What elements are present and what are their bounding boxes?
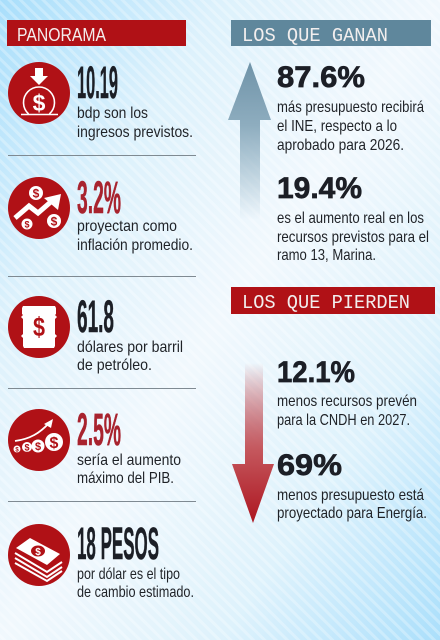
description: proyectan como [77,218,177,235]
item: pib: 2.5% [77,404,121,455]
figure: 69%: 69% [277,449,342,482]
panel: los que ganan [228,20,431,264]
item: pib [8,404,181,487]
description: ramo 13, Marina. [277,247,376,264]
arrow: down [232,363,274,523]
icon: oil barrel: $ [33,312,45,342]
description [77,452,181,487]
icon: coins with rising curve: $ [15,448,19,454]
item: tipo de cambio: 18 PESOS [77,518,159,569]
description: por dólar es el tipo [77,566,180,583]
item: inflacion: 3.2% [77,172,121,223]
heading: los que pierden [231,287,435,314]
icon: coins with rising curve: $ [24,442,30,452]
description: menos recursos prevén [277,393,417,410]
icon: rising arrow with coins: $ [33,186,40,200]
figure: 12.1%: 12.1% [277,356,355,389]
description: de petróleo. [77,357,152,374]
icon: rising arrow with coins: $ [51,214,58,228]
item: ingresos: 10.19 [77,57,118,108]
icon: coins with rising curve: $ [35,441,41,453]
icon: stack of bills [8,524,70,586]
panel: los que pierden [231,287,435,523]
description: inflación promedio. [77,237,193,254]
figure: 87.6%: 87.6% [277,61,365,94]
description [77,218,193,254]
description: sería el aumento [77,452,181,469]
description [77,105,193,141]
icon: money falling into coin: $ [33,90,46,116]
panel: panorama [7,20,196,601]
description [277,99,424,154]
item: petroleo: 61.8 [77,291,114,342]
figure: 19.4%: 19.4% [277,172,362,205]
icon: rising arrow with coins [8,177,70,239]
item: inflacion [8,172,193,254]
description [277,210,429,264]
icon: coins with rising curve: $ [50,435,59,452]
icon: oil barrel [8,296,70,358]
icon: rising arrow with coins: $ [24,220,30,230]
description [77,339,183,374]
icon: money falling into coin [8,62,70,124]
description: el INE, respecto a lo [277,118,397,135]
description: de cambio estimado. [77,584,194,601]
heading: panorama: PANORAMA [17,25,106,45]
arrow: up [228,62,271,220]
item: ingresos [8,57,193,141]
heading: los que pierden: LOS QUE PIERDEN [242,292,410,314]
icon: stack of bills: $ [35,547,41,558]
description [277,393,417,429]
item: petroleo [8,291,183,374]
item: tipo de cambio [8,518,194,601]
description: máximo del PIB. [77,470,174,487]
description: bdp son los [77,105,148,122]
description: para la CNDH en 2027. [277,412,410,429]
icon: coins with rising curve [8,409,70,471]
heading: los que ganan: LOS QUE GANAN [242,25,388,47]
description: aprobado para 2026. [277,137,404,154]
description: ingresos previstos. [77,124,193,141]
description [277,487,427,522]
heading: panorama [7,20,186,46]
heading: los que ganan [231,20,431,47]
description: dólares por barril [77,339,183,356]
description [77,566,194,601]
